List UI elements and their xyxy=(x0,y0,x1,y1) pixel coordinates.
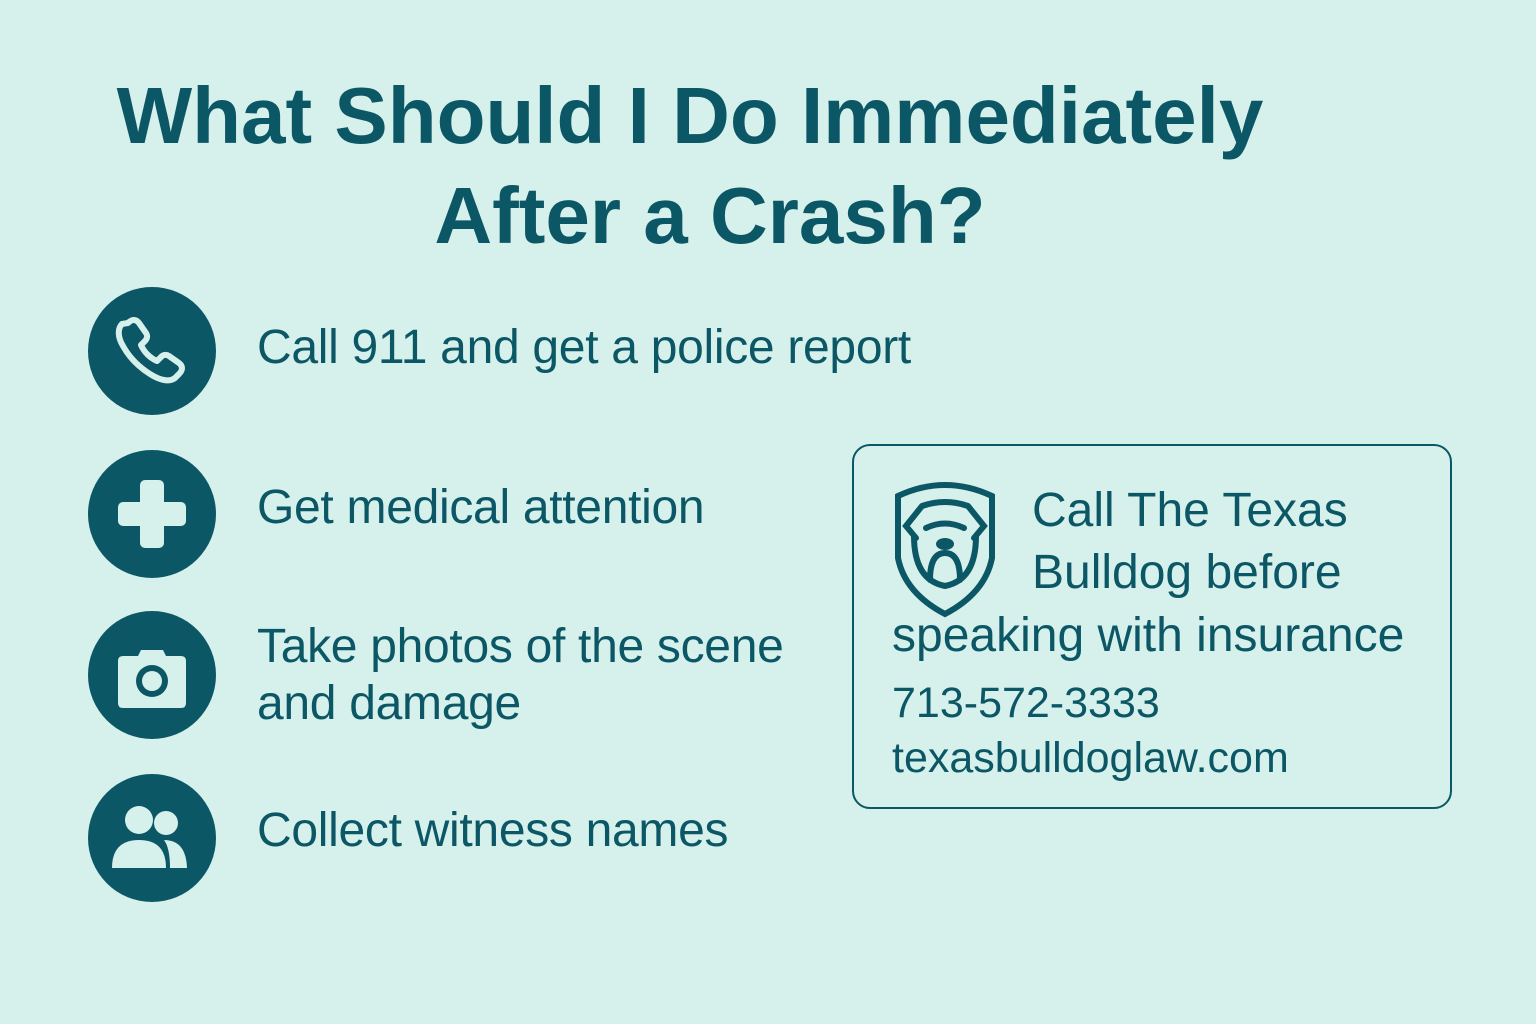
icon: bulldog shield xyxy=(895,482,995,618)
title: After a Crash? xyxy=(434,171,986,260)
icon: medical cross xyxy=(88,450,216,578)
icon: camera xyxy=(88,611,216,739)
callout box: speaking with insurance xyxy=(892,609,1404,662)
icon: people xyxy=(88,774,216,902)
text: photos: and damage xyxy=(257,677,521,730)
text: medical: Get medical attention xyxy=(257,481,704,534)
callout text: Call The Texas xyxy=(1032,484,1348,537)
title: What Should I Do Immediately xyxy=(117,71,1263,160)
title xyxy=(116,71,1263,260)
text: witnesses: Collect witness names xyxy=(257,804,728,857)
text: photos: Take photos of the scene xyxy=(257,620,784,673)
phone number: 713-572-3333 xyxy=(892,679,1160,727)
icon: phone xyxy=(88,287,216,415)
website: texasbulldoglaw.com xyxy=(892,734,1289,782)
text: call 911: Call 911 and get a police report xyxy=(257,321,911,374)
callout box: Bulldog before xyxy=(1032,546,1342,599)
callout box xyxy=(852,444,1452,809)
text: photos xyxy=(257,620,784,730)
